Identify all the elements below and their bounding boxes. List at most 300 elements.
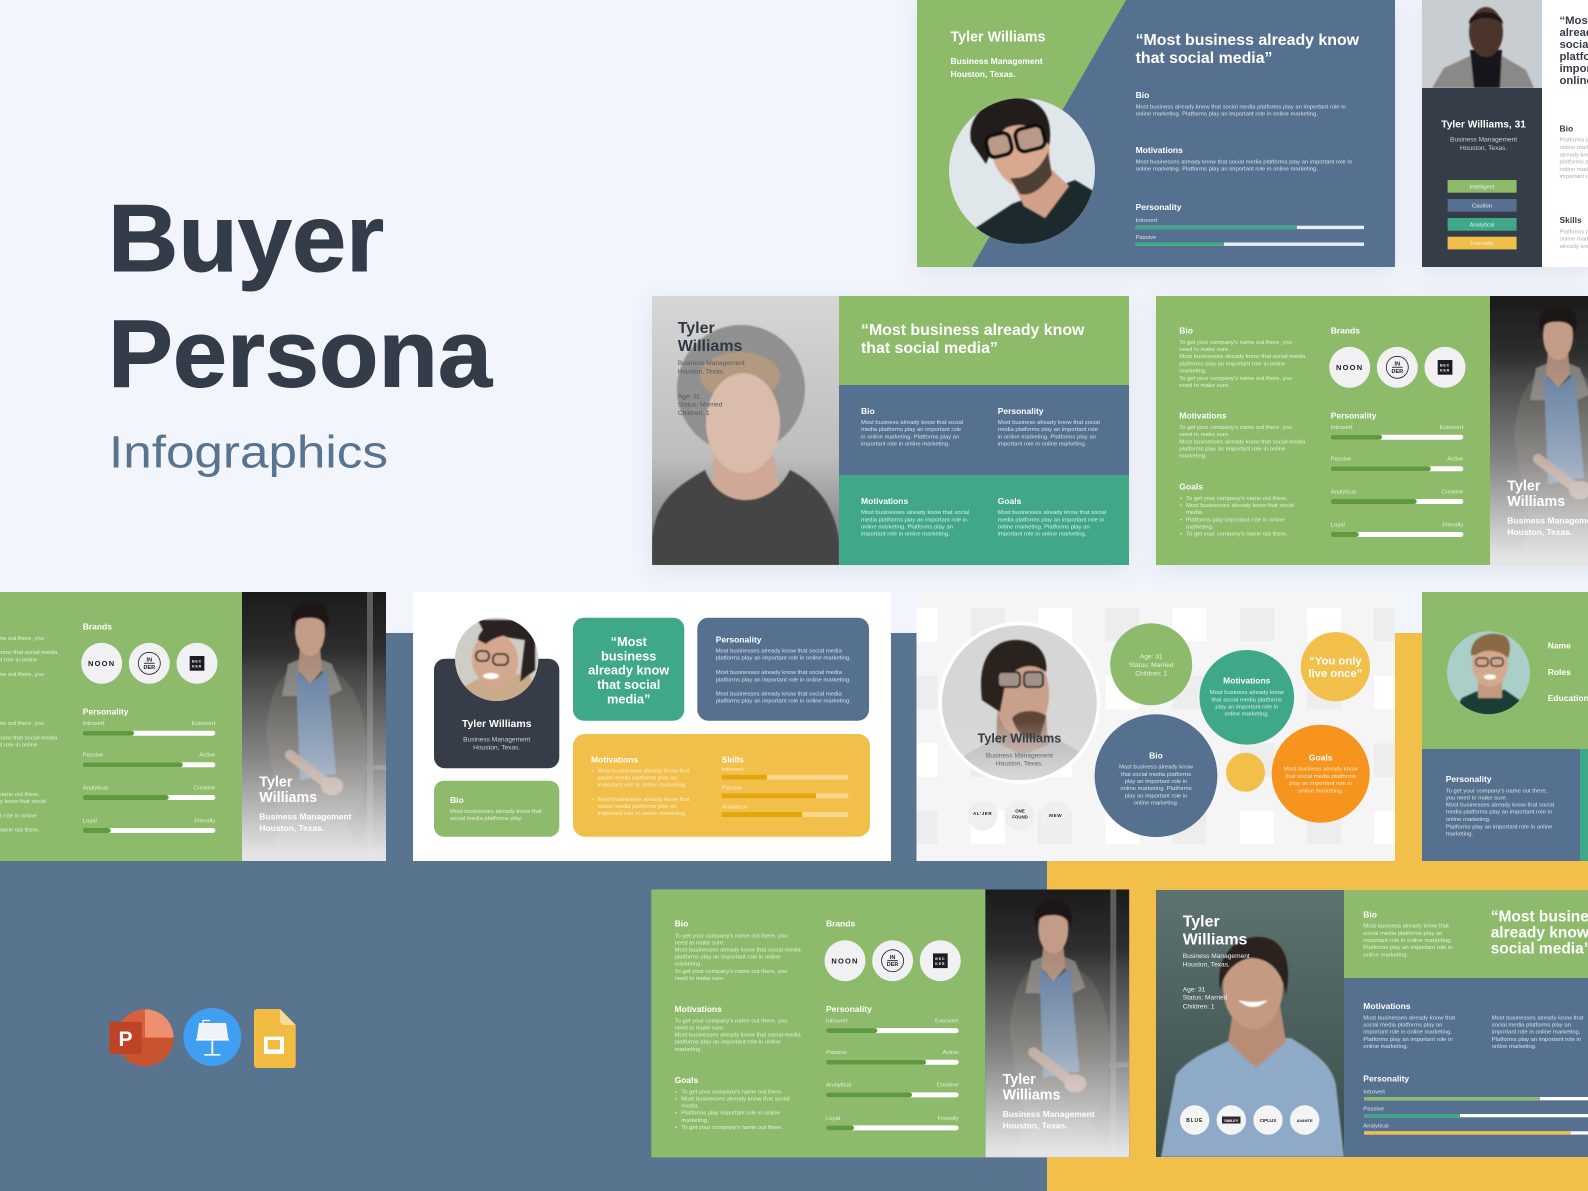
brands: Brands — [83, 621, 112, 631]
trait tags: Innovate — [1471, 241, 1493, 247]
bio card — [434, 781, 559, 837]
motivations and goals band: important role in online marketing. — [861, 532, 950, 538]
personality bars: Introvert — [1136, 218, 1158, 224]
bubble: motivations — [1200, 650, 1294, 745]
motivations and personality panel: Passive — [1363, 1106, 1385, 1112]
photo caption: Tyler — [1507, 479, 1541, 495]
personality text: Platforms play an important role in online — [1446, 824, 1553, 830]
bubble: goals: that social media platforms — [1286, 774, 1356, 780]
panel: slide 2 dark profile — [1422, 0, 1588, 267]
brands: KER — [192, 664, 202, 668]
field labels: Roles — [1548, 667, 1571, 677]
motivations and personality panel: Platforms play an important role in — [1492, 1037, 1581, 1043]
motivations: Most businesses already know that social media platforms play an important role in — [1136, 160, 1352, 166]
name and details: Age: 31 — [1183, 986, 1206, 993]
brands: NOON — [88, 659, 115, 668]
name and details: Business Management — [1183, 953, 1250, 960]
motivations and personality panel: important role in online marketing. — [1363, 1030, 1452, 1036]
left column text: Goals — [1179, 482, 1203, 492]
quote: “Most business already know — [1136, 32, 1360, 49]
name and details: Status: Married — [1183, 995, 1228, 1002]
personality bars: Creative — [193, 785, 216, 791]
name block: Tyler Williams — [950, 30, 1046, 46]
field labels: Name — [1548, 641, 1571, 651]
panel: slide 7 bubble layout — [916, 592, 1395, 861]
panel: slide 10 smiling man cropped right — [1156, 890, 1588, 1157]
photo caption: Williams — [1003, 1087, 1061, 1103]
name and details: Children: 1 — [1183, 1003, 1215, 1010]
name and details: Status: Married — [678, 402, 723, 409]
logos row: FOUND — [1012, 814, 1028, 820]
brand logos: SMILEY — [1224, 1119, 1239, 1123]
left column text: Bio — [1179, 325, 1193, 335]
left column text: • — [1180, 496, 1182, 502]
left column text: marketing. — [1186, 525, 1214, 531]
personality bars: Active — [1447, 457, 1464, 463]
personality card — [697, 618, 869, 721]
motivations and goals band: online marketing. Platforms play an — [998, 524, 1090, 530]
photo caption: Tyler — [1003, 1072, 1036, 1088]
brands: DER — [143, 665, 155, 671]
name block — [950, 30, 1046, 79]
photo caption: Houston, Texas. — [1507, 527, 1572, 537]
portrait circle: Business Management — [986, 753, 1053, 760]
motivations and skills card: important role in online marketing. — [598, 782, 687, 788]
icon: PowerPoint: P — [118, 1028, 133, 1051]
skills: Skills — [1560, 215, 1582, 225]
logos row: MEW — [1049, 813, 1062, 818]
bio and quote band: Bio — [1363, 909, 1377, 919]
bubble: goals — [1272, 725, 1370, 823]
left column text: marketing. — [675, 962, 702, 968]
bio and personality band: in online marketing. Platforms play an — [998, 434, 1096, 440]
motivations and personality panel: online marketing. — [1363, 1044, 1409, 1050]
left column text: • — [1180, 503, 1182, 509]
left column text: To get your company's name out there, you — [1179, 376, 1292, 382]
photo caption — [259, 775, 352, 833]
bio and personality band: important role in online marketing. — [861, 442, 950, 448]
name and details: Business Management — [678, 360, 745, 367]
left column text: Bio — [675, 919, 688, 929]
bio card: Most businesses already know that — [450, 809, 542, 815]
profile card: Tyler Williams — [462, 718, 532, 730]
motivations and goals band: Most businesses already know that social — [998, 510, 1106, 516]
photo: man in jacket — [1490, 296, 1588, 565]
left column text: • — [1180, 532, 1182, 538]
motivations and personality panel: Most businesses already know that — [1363, 1015, 1455, 1021]
bio: Bio — [1136, 90, 1149, 100]
personality bars: Friendly — [938, 1116, 959, 1122]
left column text: Platforms play important role in online — [1186, 517, 1285, 523]
bubble: motivations: play an important role in — [1215, 704, 1278, 710]
photo: smiling man in blue shirt — [1156, 890, 1344, 1157]
bubble: small yellow — [1226, 753, 1265, 792]
name block — [1441, 120, 1526, 152]
personality bars: Passive — [826, 1050, 847, 1056]
bubble: goals: Most business already know — [1284, 767, 1358, 773]
personality text — [1446, 774, 1554, 837]
left column text: need to make sure. — [675, 1025, 725, 1031]
motivations — [1136, 145, 1352, 173]
personality bars: Loyal — [1331, 523, 1345, 529]
personality bars: Creative — [1441, 489, 1464, 495]
name and details: Williams — [1183, 931, 1248, 948]
green diagonal — [917, 0, 1126, 267]
subtitle: Infographics — [109, 427, 388, 478]
quote card: “Most — [611, 634, 648, 649]
bio and personality band: media platforms play an important role — [998, 427, 1099, 433]
personality bars: Introvert — [826, 1018, 848, 1024]
personality bars: Extrovert — [192, 721, 216, 727]
skills — [1560, 215, 1588, 250]
personality bars: Introvert — [1331, 425, 1353, 431]
bubble: bio: play an important role in — [1125, 793, 1187, 799]
personality bars — [1331, 411, 1464, 537]
bubble: goals: online marketing. — [1298, 788, 1343, 794]
left column text — [0, 621, 58, 834]
bio — [1560, 124, 1588, 180]
motivations and personality panel: Analytical — [1363, 1123, 1389, 1129]
icon: Google Slides — [254, 1009, 296, 1068]
left column text: To get your company's name out there, you — [675, 1018, 787, 1024]
photo caption: Williams — [259, 790, 317, 806]
quote card — [573, 618, 684, 721]
panel: slide 1 green and blue quote — [917, 0, 1395, 267]
bubble: motivations: Motivations — [1223, 676, 1271, 686]
bio and quote band: Platforms play an important role in — [1363, 945, 1453, 951]
bubble: demographics: Status: Married — [1129, 662, 1174, 669]
photo caption: Williams — [1507, 494, 1565, 510]
bubble: quote — [1301, 632, 1370, 701]
trait tags: Analytical — [1470, 222, 1494, 228]
left column text: media. — [681, 1103, 699, 1109]
motivations and skills card: • — [592, 768, 594, 774]
left column text: • — [675, 1125, 677, 1131]
personality bars: Personality — [83, 707, 129, 717]
personality bars: Analytical — [826, 1083, 851, 1089]
bubble: motivations: that social media platforms — [1212, 697, 1282, 703]
bubble: bio — [1095, 714, 1217, 837]
title: Persona — [108, 301, 493, 408]
brand logos: AVANTE — [1297, 1118, 1313, 1123]
personality bars — [83, 707, 216, 833]
bubble: demographics: Age: 31 — [1140, 654, 1163, 661]
bio and quote band: important role in online marketing. — [1363, 938, 1452, 944]
logos row: ONE — [1015, 808, 1025, 814]
name block: Houston, Texas. — [950, 69, 1016, 79]
personality bars — [1136, 202, 1364, 246]
motivations and goals band: Most businesses already know that social — [861, 510, 969, 516]
left column text: To get your company's name out there. — [1186, 532, 1288, 538]
bubble: bio: Most business already know — [1119, 765, 1194, 771]
bio and personality band: media platforms play an important role — [861, 427, 962, 433]
personality text: media platforms play an important role in — [1446, 810, 1552, 816]
photo caption: Houston, Texas. — [259, 823, 324, 833]
left column text: platforms play an important role in online — [1179, 361, 1286, 367]
photo: man in blazer — [1422, 0, 1542, 88]
photo: curly haired man — [650, 296, 839, 574]
left column text: need to make sure. — [675, 976, 725, 982]
brand logos: CIPLUX — [1260, 1118, 1277, 1123]
name and details: Houston, Texas. — [678, 368, 725, 375]
field labels — [1548, 641, 1588, 703]
motivations and goals band: media platforms play an important role in — [998, 517, 1104, 523]
left column text: Motivations — [1179, 411, 1227, 421]
bubble: demographics — [1110, 623, 1192, 705]
motivations and skills card: social media platforms play an — [598, 804, 677, 810]
panel: slide 8 green profile cropped right — [1422, 592, 1588, 861]
bubble: bio: that social media platforms — [1121, 772, 1191, 778]
panel: slide 9 green brands bottom — [651, 889, 1129, 1159]
bubble: goals: Goals — [1309, 752, 1333, 762]
personality card: Personality — [716, 635, 762, 645]
brands: NOON — [831, 956, 859, 965]
bio: Bio — [1560, 124, 1573, 134]
quote card: media” — [607, 691, 650, 706]
trait tags — [1448, 180, 1517, 249]
personality card: Most businesses already know that social media — [716, 670, 842, 676]
motivations and personality panel: Introvert — [1363, 1089, 1385, 1095]
name and details: Tyler — [678, 320, 715, 337]
photo: man with glasses — [949, 98, 1095, 244]
bubble: goals: play an important role in — [1289, 781, 1352, 787]
quote band: “Most business already know — [861, 322, 1085, 339]
personality bars: Extrovert — [1440, 425, 1464, 431]
name and details — [1183, 914, 1250, 1010]
motivations: online marketing. Platforms play an important role in online marketing. — [1136, 167, 1318, 173]
left column text: Most businesses already know that social — [681, 1096, 790, 1102]
bio and personality band: Most business already know that social — [998, 420, 1100, 426]
profile card — [434, 617, 559, 768]
brands: Brands — [826, 919, 856, 929]
personality bars: Friendly — [194, 819, 215, 825]
left column text: To get your company's name out there, you — [1179, 425, 1292, 431]
brands: DER — [887, 962, 898, 968]
motivations and skills card: Most businesses already know that — [598, 797, 690, 803]
motivations and skills card: Most businesses already know that — [598, 768, 690, 774]
personality text: Most businesses already know that social — [1446, 803, 1554, 809]
quote band: that social media” — [861, 340, 998, 357]
profile card: Houston, Texas. — [473, 745, 520, 752]
field labels: Education — [1548, 693, 1588, 703]
brands: IN — [1395, 362, 1400, 368]
personality card: Most businesses already know that social media — [716, 649, 842, 655]
icon: Keynote — [183, 1008, 241, 1066]
personality bars: Active — [199, 753, 216, 759]
bubble: quote: live once” — [1308, 668, 1362, 680]
trait tags: Intelligent — [1470, 184, 1495, 190]
photo: man in jacket — [985, 889, 1130, 1158]
motivations and goals band: media platforms play an important role in — [861, 517, 967, 523]
bubble: quote: “You only — [1309, 655, 1362, 667]
portrait circle: Houston, Texas. — [996, 761, 1043, 768]
motivations and goals band — [839, 475, 1129, 565]
bio — [1136, 90, 1346, 118]
left column text: platforms play an important role in online — [675, 1040, 781, 1046]
left column text: need to make sure. — [1179, 432, 1230, 438]
left column text: Platforms play important role in online — [681, 1111, 781, 1117]
personality bars: Analytical — [83, 785, 108, 791]
left column text: Goals — [675, 1075, 698, 1085]
motivations and skills card: Skills — [722, 754, 744, 764]
personality bars: Friendly — [1442, 523, 1463, 529]
personality text: Personality — [1446, 774, 1492, 784]
motivations and goals band: Goals — [998, 496, 1022, 506]
quote band — [839, 296, 1129, 385]
left column text: marketing. — [1179, 454, 1207, 460]
trait tags: Caution — [1472, 204, 1492, 210]
left column text: need to make sure. — [1179, 347, 1230, 353]
logos row — [968, 801, 1071, 831]
bio card: social media platforms play. — [450, 816, 523, 822]
quote card: that social — [597, 677, 660, 692]
personality card: platforms play an important role in online marketing. — [716, 699, 851, 705]
bubble: motivations: online marketing. — [1224, 712, 1270, 718]
bio and quote band: social media platforms play an — [1363, 931, 1443, 937]
photo: man in jacket — [242, 592, 386, 861]
bio and personality band: important role in online marketing. — [998, 442, 1087, 448]
left column text: To get your company's name out there. — [1186, 496, 1288, 502]
personality card: platforms play an important role in online marketing. — [716, 677, 851, 683]
left column text: • — [675, 1096, 677, 1102]
bio and personality band: in online marketing. Platforms play an — [861, 434, 959, 440]
name and details: Williams — [678, 338, 743, 355]
brands: KER — [935, 962, 945, 966]
motivations and personality panel: Personality — [1363, 1073, 1409, 1083]
left column text: To get your company's name out there, you — [675, 969, 787, 975]
name and details: Age: 31 — [678, 393, 701, 400]
motivations and skills card: Passive — [722, 786, 743, 792]
left column text: To get your company's name out there. — [681, 1125, 783, 1131]
left column text: • — [675, 1111, 677, 1117]
motivations and personality panel: important role in online marketing. — [1492, 1030, 1581, 1036]
motivations and skills card — [573, 734, 870, 837]
personality text: marketing. — [1446, 831, 1474, 837]
personality bars: Passive — [1136, 235, 1157, 241]
brands: IN — [147, 658, 152, 664]
brands: DER — [1391, 369, 1403, 375]
bubble: bio: online marketing. — [1134, 800, 1179, 806]
brand logos: BLUE — [1186, 1118, 1203, 1124]
icon: PowerPoint — [109, 1009, 174, 1066]
motivations and skills card: Analytical — [722, 804, 747, 810]
motivations and skills card: important role in online marketing. — [598, 811, 687, 817]
personality bars: Loyal — [83, 819, 97, 825]
bio and personality band — [839, 385, 1129, 475]
motivations and skills card: • — [592, 797, 594, 803]
left column text: marketing. — [1179, 368, 1207, 374]
brands: NOON — [1336, 363, 1363, 372]
portrait circle: Tyler Williams — [978, 732, 1061, 746]
motivations and personality panel: Most businesses already know that — [1492, 1015, 1584, 1021]
photo caption: Business Management — [259, 812, 352, 822]
left column text: Most businesses already know that social — [1186, 503, 1294, 509]
name and details: Houston, Texas. — [1183, 961, 1230, 968]
bio and personality band: Personality — [998, 406, 1044, 416]
motivations and skills card: Introvert — [722, 767, 744, 773]
bubble: bio: online marketing. Platforms — [1120, 786, 1192, 792]
left column text: To get your company's name out there, you — [675, 933, 787, 939]
name block: Houston, Texas. — [1460, 145, 1507, 152]
panel: slide 3 photo with blocks — [652, 296, 1129, 565]
panel: slide 5 green brands cropped left — [0, 592, 386, 862]
motivations and personality panel: Platforms play an important role in — [1363, 1037, 1453, 1043]
personality bars: Personality — [1136, 202, 1182, 212]
left column text: Most businesses already know that social media — [675, 1033, 801, 1039]
bio: online marketing. Platforms play an important role in online marketing. — [1136, 112, 1318, 118]
left column text: marketing. — [681, 1118, 709, 1124]
left column text — [1179, 325, 1306, 538]
motivations and personality panel: social media platforms play an — [1492, 1023, 1571, 1029]
motivations and personality panel: social media platforms play an — [1363, 1023, 1443, 1029]
personality bars: Passive — [1331, 457, 1352, 463]
bubble: bio: Bio — [1149, 750, 1163, 760]
brands: KER — [1440, 368, 1450, 372]
photo caption: Tyler — [259, 775, 293, 791]
personality text: you need to make sure. — [1446, 795, 1508, 801]
quote card: already know — [588, 663, 669, 678]
motivations and personality panel: Motivations — [1363, 1001, 1411, 1011]
left column text: Motivations — [675, 1004, 722, 1014]
panel: slide 6 rounded cards — [413, 592, 891, 861]
bio and quote band: online marketing. — [1363, 952, 1409, 958]
personality card: platforms play an important role in online marketing. — [716, 656, 851, 662]
name and details — [678, 320, 745, 417]
photo caption: Houston, Texas. — [1003, 1120, 1068, 1130]
brands — [824, 919, 961, 981]
motivations and personality panel: online marketing. — [1492, 1044, 1537, 1050]
motivations and goals band: online marketing. Platforms play an — [861, 524, 953, 530]
brands — [81, 621, 218, 684]
left column text: need to make sure. — [675, 940, 725, 946]
profile card: Business Management — [463, 737, 530, 744]
personality text: To get your company's name out there, — [1446, 788, 1548, 794]
title — [108, 185, 493, 408]
left column text: platforms play an important role in online — [1179, 446, 1286, 452]
left column text: To get your company's name out there, you — [1179, 340, 1292, 346]
bio and personality band: Most business already know that social — [861, 420, 963, 426]
bubble: motivations: Most business already know — [1210, 690, 1285, 696]
brands: BEC — [192, 660, 202, 664]
motivations and personality panel — [1344, 978, 1588, 1157]
brands: BEC — [1440, 364, 1450, 368]
name block: Tyler Williams, 31 — [1441, 120, 1526, 131]
photo: smiling man with glasses — [455, 617, 540, 705]
left column text: need to make sure. — [1179, 383, 1230, 389]
personality bars: Passive — [83, 753, 104, 759]
bubble: demographics: Children: 1 — [1135, 670, 1167, 677]
left column text: media. — [1186, 510, 1204, 516]
photo: blond man — [1445, 630, 1533, 716]
personality card: Most businesses already know that social media — [716, 691, 842, 697]
left column text: • — [675, 1089, 677, 1095]
bio and quote band — [1344, 890, 1588, 978]
bio and quote band: Most business already know that — [1363, 924, 1449, 930]
left column text: • — [1180, 517, 1182, 523]
bio card: Bio — [450, 795, 464, 805]
personality bars — [826, 1004, 959, 1130]
title: Buyer — [108, 185, 384, 292]
personality bars: Extrovert — [935, 1018, 959, 1024]
name block: Business Management — [1450, 137, 1517, 144]
portrait circle — [938, 622, 1100, 790]
left column text: platforms play an important role in online — [675, 955, 781, 961]
personality text: online marketing. — [1446, 817, 1491, 823]
bubble: bio: play an important role in — [1125, 779, 1187, 785]
brands — [1329, 325, 1466, 388]
left column text: Most businesses already know that social media — [1179, 354, 1306, 360]
left column text — [675, 919, 801, 1131]
